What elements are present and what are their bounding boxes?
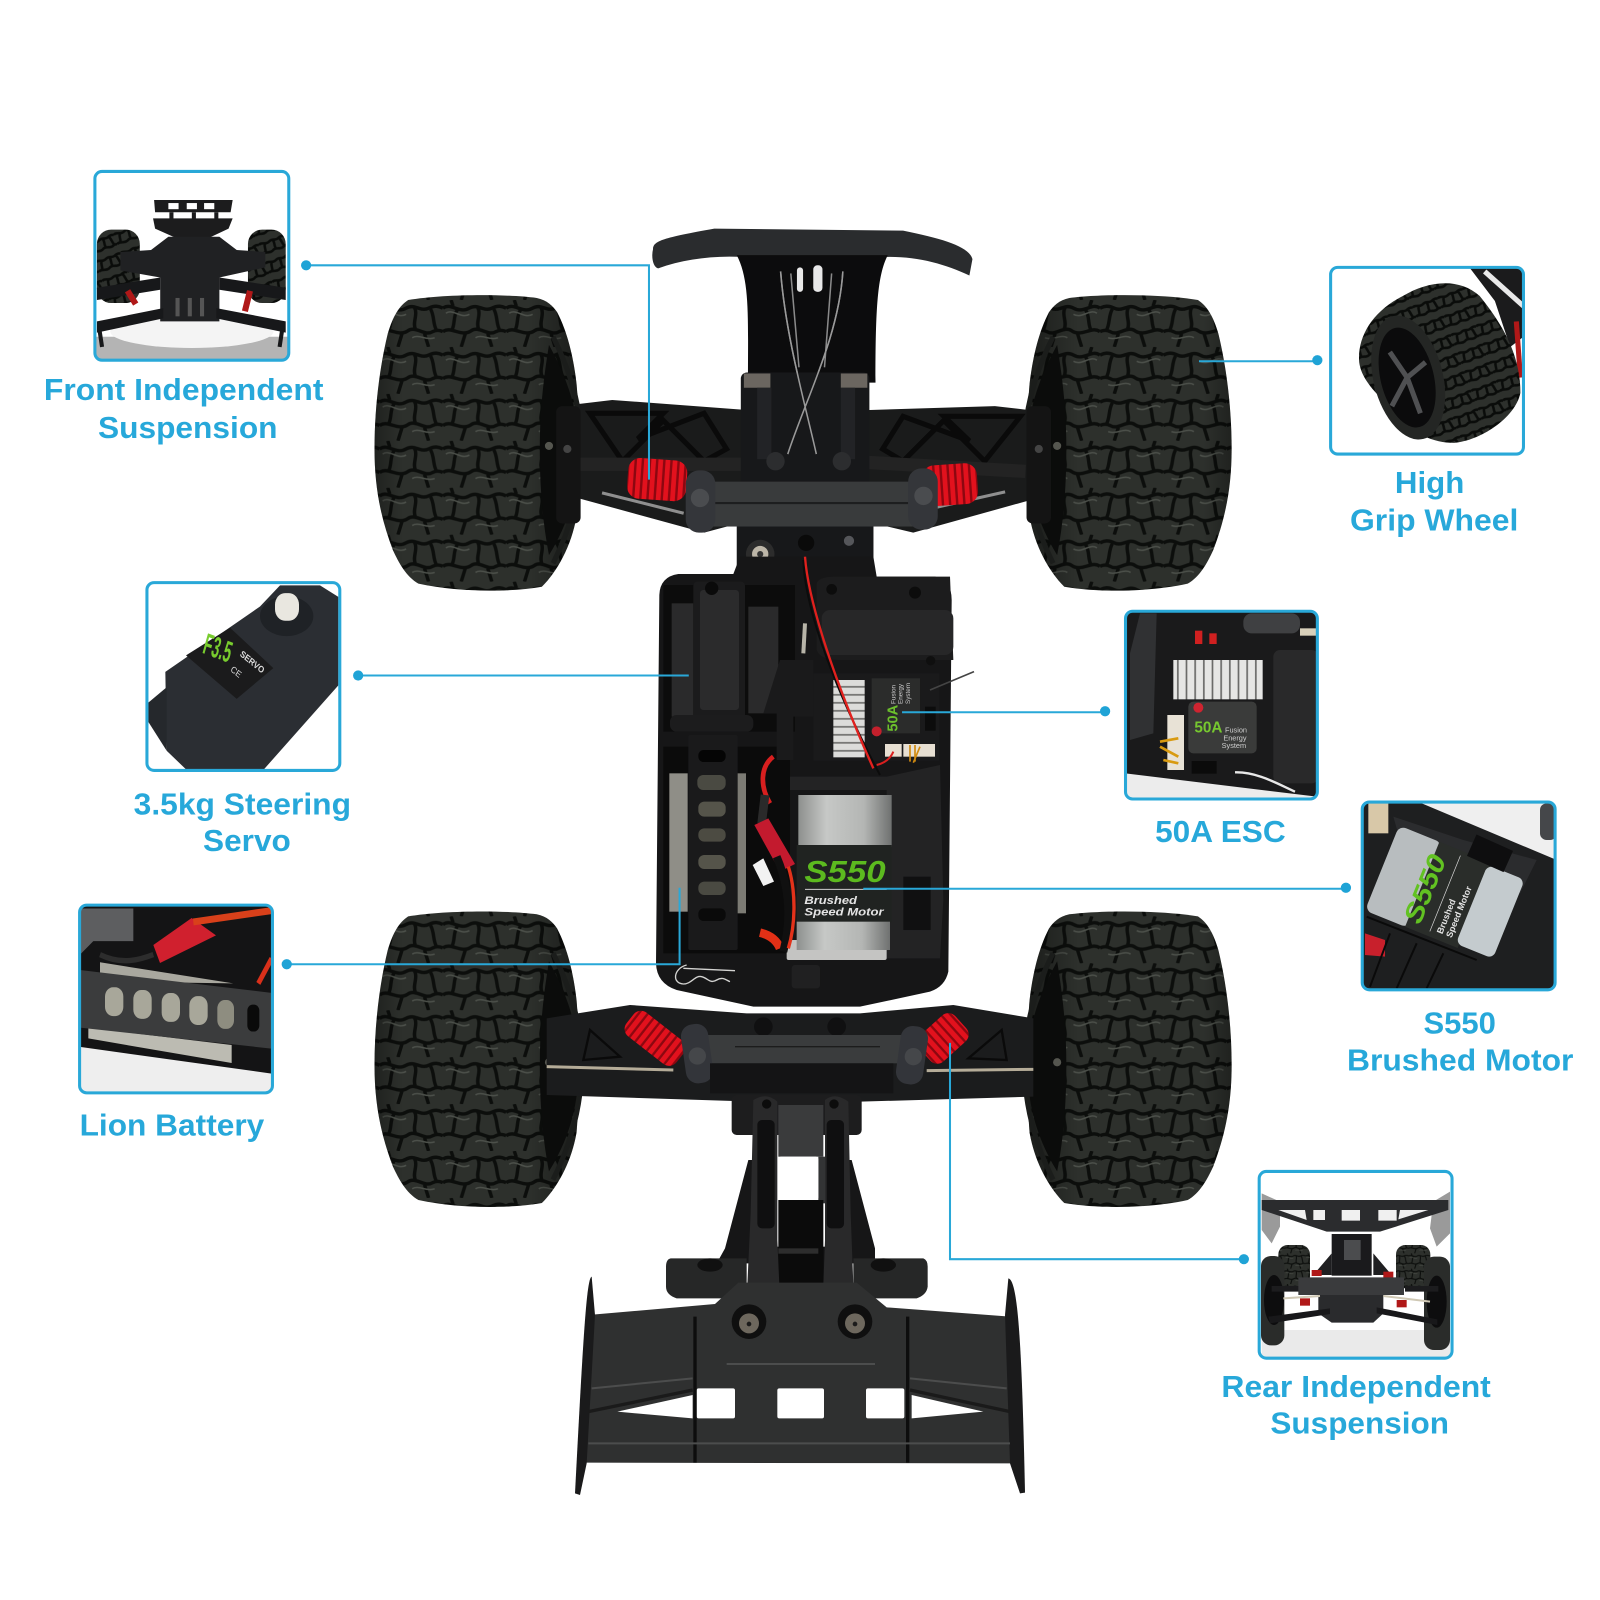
card border: [95, 171, 289, 360]
card border: [80, 905, 272, 1093]
rear arms: [547, 1005, 1033, 1102]
leader line: ESC: [902, 706, 1110, 716]
leader line: steering servo: [353, 670, 689, 681]
label: Rear Independent: [1221, 1370, 1491, 1404]
label: 3.5kg Steering: [134, 787, 351, 821]
label: Suspension: [1270, 1407, 1449, 1441]
S550 brushed motor: S550: [804, 855, 886, 889]
leader line: battery: [282, 888, 680, 969]
ESC 50A: 50A: [885, 704, 901, 732]
thumbnail: servo: [147, 583, 340, 770]
panel: steering servo: [134, 583, 351, 858]
front left spring: [626, 457, 688, 502]
front bumper bar: [686, 468, 938, 533]
front right tire: [1024, 295, 1232, 591]
panel: S550 brushed motor: [1347, 802, 1574, 1077]
body clip: [676, 965, 735, 984]
rear wing: [575, 1277, 1025, 1495]
card border: [1362, 802, 1555, 990]
label: [134, 787, 351, 858]
rear left spring: [621, 1007, 689, 1070]
leader line: high grip wheel: [1199, 355, 1322, 365]
ESC 50A: Energy: [898, 683, 905, 704]
thumbnail: motor: [1362, 802, 1557, 990]
panel: lion battery: [80, 905, 273, 1143]
truck chassis top view: [374, 229, 1232, 1495]
label: Servo: [203, 824, 291, 858]
rear cross bar: [666, 1258, 928, 1298]
label: [44, 373, 323, 445]
thumbnail: front view: [96, 200, 288, 359]
leader line: front suspension: [301, 260, 649, 480]
panel: 50A ESC: [1125, 611, 1318, 849]
front right spring: [921, 462, 979, 507]
servo link: [763, 660, 813, 760]
panel: rear independent suspension: [1221, 1171, 1491, 1441]
thumbnail: wheel: [1359, 268, 1522, 443]
red connector and wires: [753, 757, 795, 952]
S550 brushed motor: Brushed: [804, 895, 857, 907]
thumbnail: ESC: [1125, 611, 1318, 800]
ESC 50A: System: [905, 683, 912, 704]
front left tire: [374, 295, 582, 591]
rear left tire: [374, 911, 582, 1207]
battery pack and tray: [669, 735, 746, 950]
thumbnail: battery tray: [80, 905, 273, 1097]
label: Suspension: [98, 411, 278, 445]
steering servo: [663, 582, 803, 732]
front centre block: [737, 271, 873, 582]
label: [1347, 1007, 1574, 1077]
rear right spring: [913, 1009, 973, 1068]
battery bay floor: [663, 747, 790, 953]
front suspension arms: [556, 400, 1051, 533]
label: Grip Wheel: [1350, 504, 1518, 538]
label: High: [1395, 466, 1464, 500]
power switch: [903, 877, 931, 930]
card border: [1126, 611, 1317, 799]
panel: high grip wheel: [1331, 267, 1523, 538]
label: Brushed Motor: [1347, 1043, 1574, 1077]
thumbnail: motor: Brushed: [1435, 898, 1458, 935]
silver bolt: [746, 540, 774, 568]
leader line: rear suspension: [950, 1043, 1249, 1264]
rear wing mount: [717, 1095, 875, 1287]
thumbnail: servo: SERVO: [238, 648, 267, 676]
thumbnail: ESC: Energy: [1223, 733, 1247, 742]
S550 brushed motor: [787, 795, 892, 960]
thumbnail: servo: F3.5: [200, 627, 236, 669]
thumbnail: ESC: 50A: [1194, 719, 1222, 736]
label: [1221, 1370, 1491, 1441]
label: S550: [1423, 1007, 1496, 1041]
ESC 50A: [813, 672, 974, 765]
thumbnail: motor: S550: [1398, 850, 1452, 928]
front assembly: [556, 229, 1051, 582]
S550 brushed motor: Speed Motor: [804, 906, 885, 918]
thumbnail: ESC: Fusion: [1225, 726, 1247, 735]
card border: [147, 583, 340, 770]
rear axle rod: [547, 1067, 1033, 1071]
card border: [1259, 1171, 1452, 1358]
rear bumper bar: [679, 1022, 930, 1093]
thumbnail: rear view: [1261, 1192, 1450, 1356]
label: Lion Battery: [80, 1109, 264, 1143]
motor bracket: [790, 765, 943, 958]
thumbnail: motor: Speed Motor: [1444, 884, 1474, 939]
panel: front independent suspension: [44, 171, 323, 445]
rear right tire: [1024, 911, 1232, 1207]
tub shell: [656, 557, 952, 1007]
leader line: motor: [863, 883, 1351, 893]
centre tub: servo, ESC, battery, motor: [656, 557, 974, 1007]
ESC 50A: Fusion: [890, 685, 897, 704]
label: Front Independent: [44, 373, 323, 407]
card border: [1331, 267, 1523, 454]
thumbnail: ESC: System: [1222, 741, 1246, 750]
ESC cover: [817, 577, 953, 665]
front mount: [737, 255, 888, 454]
rear assembly: [547, 1005, 1033, 1495]
label: [1350, 466, 1518, 538]
label: 50A ESC: [1155, 815, 1286, 849]
front bumper: [652, 229, 972, 276]
ESC power wires: [803, 557, 880, 775]
thumbnail: servo: CE: [229, 664, 244, 680]
lower tab: [792, 965, 820, 988]
